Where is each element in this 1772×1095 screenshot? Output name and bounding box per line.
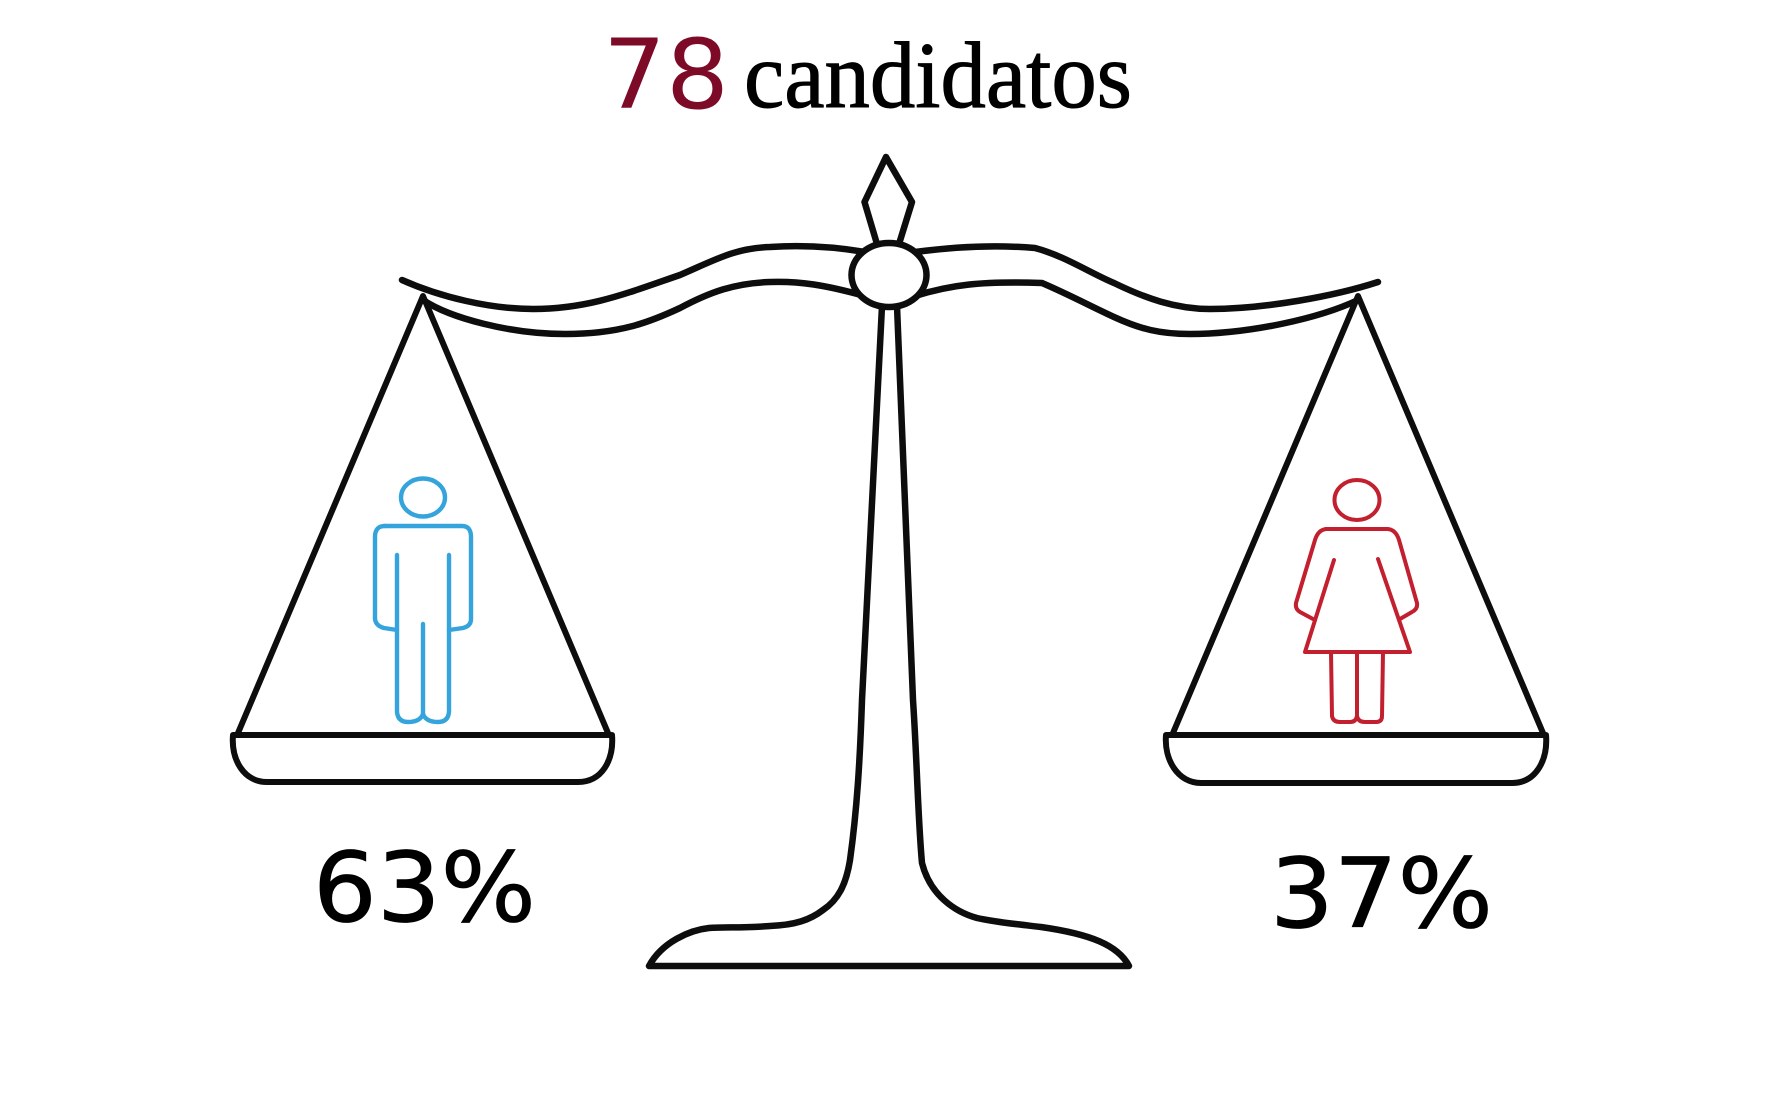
scale: central stand and beam — [402, 157, 1378, 966]
right pan dish — [1166, 735, 1546, 783]
icon: man (blue) — [375, 478, 471, 722]
title: 78 candidatos — [603, 19, 1132, 131]
left pan dish — [233, 735, 612, 782]
title: 78 candidatos: 78 — [603, 19, 729, 131]
left pan strings — [238, 296, 608, 733]
title: 78 candidatos: candidatos — [744, 24, 1132, 128]
label: 63% men: 63% — [313, 832, 536, 944]
left pan with male figure — [233, 296, 612, 782]
beam: right arm — [915, 246, 1378, 334]
right pan strings — [1173, 296, 1543, 733]
stand column and base — [649, 306, 1129, 966]
right pan with female figure — [1166, 296, 1546, 783]
pivot circle — [852, 243, 926, 307]
beam: left arm — [402, 246, 865, 334]
label: 37% women: 37% — [1270, 838, 1493, 950]
finial diamond — [864, 157, 912, 244]
icon: woman (red) — [1296, 480, 1417, 722]
